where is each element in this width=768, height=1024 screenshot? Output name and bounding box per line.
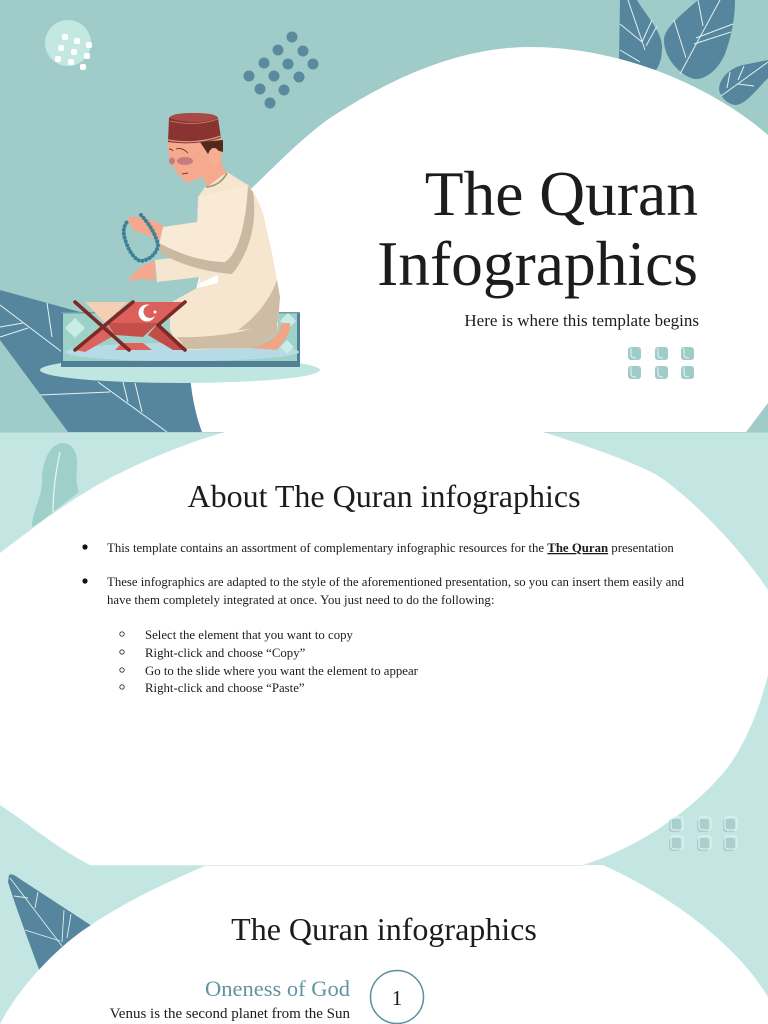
title [377,158,698,299]
white gap under sleeve [197,275,218,288]
lower sleeve [155,256,217,282]
icon: faded rounded squares [669,817,737,851]
eyes and mouth [169,148,188,174]
icon: pale dotted circle [45,20,92,70]
number badge 1: 1 [392,986,402,1010]
icon: blue leaf [8,874,92,972]
title: Infographics [377,228,698,299]
number badge 1 [370,970,424,1024]
title: The Quran [425,158,698,229]
item heading: Oneness of God: Oneness of God [205,976,350,1001]
icon: pale leaf [32,443,79,527]
robe [170,172,280,350]
panel: title slide [0,0,768,432]
ear [208,148,220,166]
sub-list of steps: Select the element that you want to copy [145,628,353,642]
sub-list of steps: Go to the slide where you want the element to appear [145,664,419,678]
floor shadow ellipse [40,357,320,383]
face and neck [168,138,227,187]
sub-list of steps [120,628,419,695]
prayer rug [61,312,300,367]
sub-list of steps: Right-click and choose “Copy” [145,646,306,660]
bullet list: have them completely integrated at once. You just need to do the following: [107,593,494,607]
robe lower shadow [177,280,280,349]
icon: teal rounded squares [628,347,694,379]
panel: infographic slide [0,865,768,1024]
sleeve shadow [159,186,254,274]
white content blob [0,432,768,865]
cheek blush [169,157,193,165]
lower hand [128,261,155,282]
icon: bottom left leaf [0,290,202,432]
panel: about slide [0,432,768,865]
item description: Venus is the second planet from the Sun [110,1006,350,1022]
sub-list of steps: Right-click and choose “Paste” [145,681,305,695]
collar [206,173,227,187]
white title blob [189,47,768,432]
cap [168,113,221,143]
hair [200,140,223,154]
upper sleeve [159,186,251,272]
crescent and star [138,304,156,322]
bullet list [82,541,685,607]
bullet list: These infographics are adapted to the style of the aforementioned presentation, so you can insert them easily and [107,575,685,589]
upper hand [127,217,163,240]
heading: About The Quran infographics [187,478,581,514]
subtitle: Here is where this template begins [464,311,699,330]
illustration: praying man with Quran [40,113,320,383]
foot [250,323,290,350]
book stand [75,302,185,352]
white content blob [0,865,768,1024]
icon: top right leaves [619,0,768,105]
heading: The Quran infographics [231,911,537,947]
icon: blue dot grid [244,32,318,108]
prayer beads [124,215,158,261]
bullet list: This template contains an assortment of complementary infographic resources for the The Quran presentation [107,541,674,555]
